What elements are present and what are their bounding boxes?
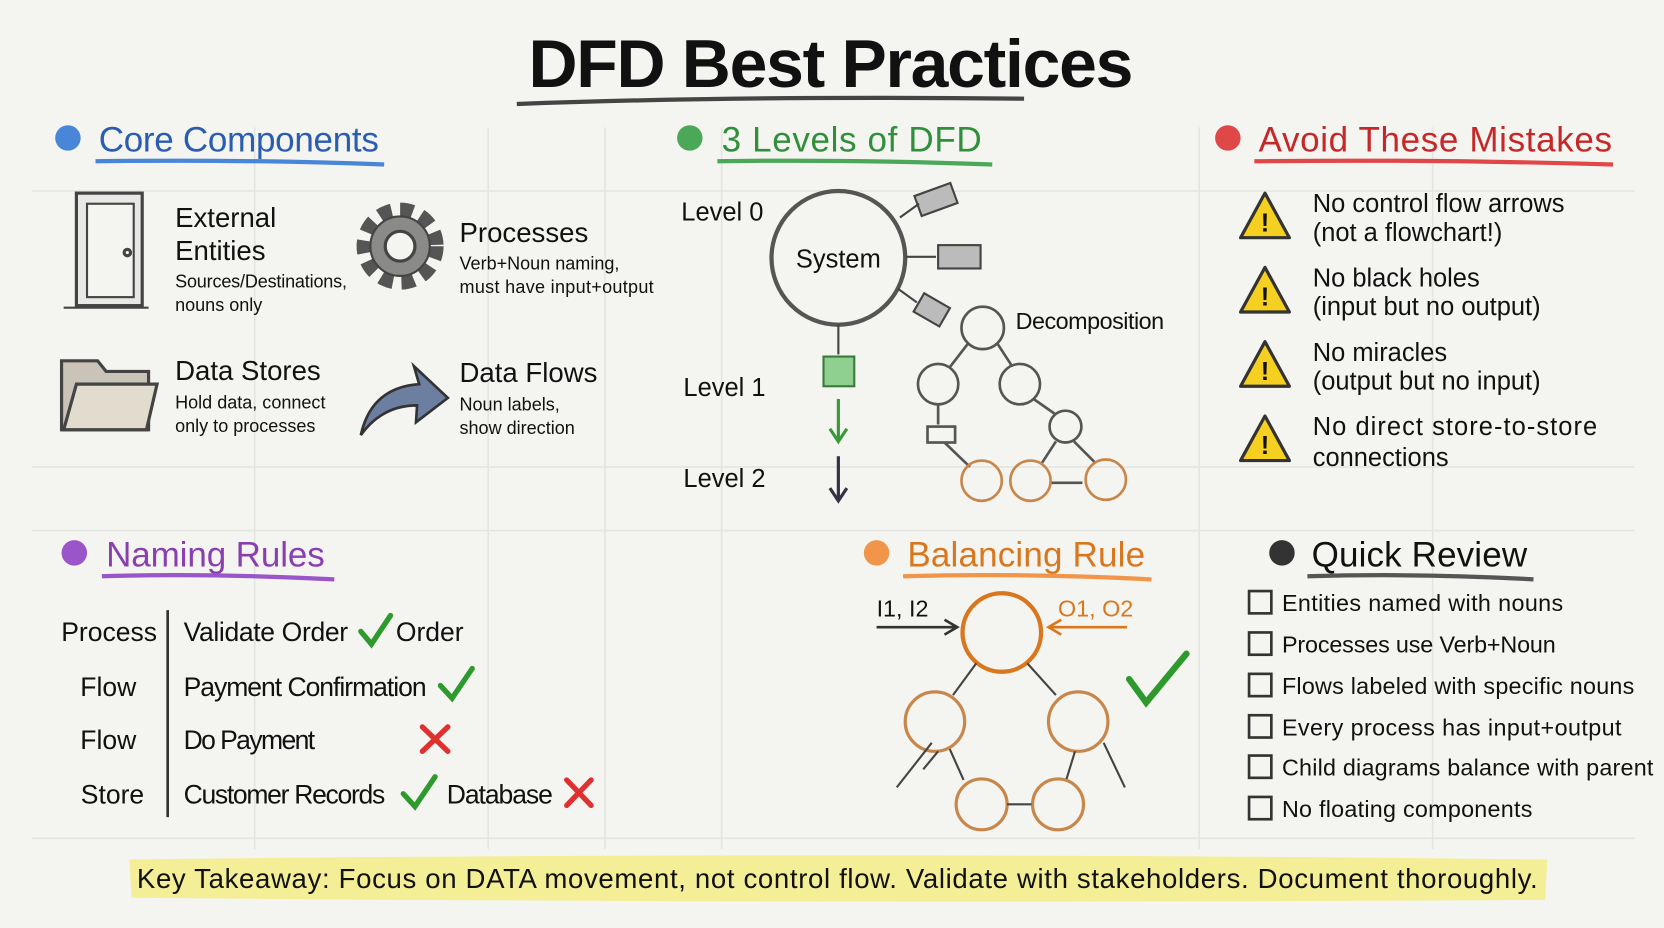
key takeaway (129, 855, 1547, 902)
heading: 3 levels: 3 Levels of DFD (722, 121, 982, 160)
panel: quick review checklist: Flows labeled with specific nouns (1282, 673, 1634, 699)
panel: quick review checklist: Processes use Verb+Noun (1282, 632, 1556, 658)
panel: mistakes: connections (1313, 444, 1449, 472)
panel: quick review checklist: Child diagrams balance with parent (1282, 755, 1654, 781)
icon: gear (364, 210, 436, 282)
panel: balancing diagram (877, 593, 1186, 830)
panel: naming rules table (61, 610, 591, 817)
panel: naming rules table: Process (61, 617, 157, 647)
panel: balancing diagram: O1, O2 (1058, 596, 1133, 622)
heading: quick review: Quick Review (1312, 536, 1528, 575)
panel: 3 levels diagram: Level 1 (683, 374, 766, 402)
panel: core components: Data Flows (460, 357, 597, 388)
panel: mistakes: No direct store-to-store (1313, 413, 1597, 441)
panel: mistakes: (output but no input) (1313, 367, 1541, 395)
panel: naming rules table: Customer Records (184, 779, 385, 809)
panel: naming rules table: Payment Confirmation (184, 672, 427, 702)
panel: mistakes: No control flow arrows (1313, 190, 1565, 218)
panel: naming rules table: Validate Order (184, 617, 348, 647)
heading: naming rules: Naming Rules (106, 536, 325, 575)
panel: core components: only to processes (175, 416, 315, 436)
panel: 3 levels diagram: Level 2 (683, 465, 766, 493)
icon: arrow (361, 366, 448, 435)
panel: core components: Noun labels, (460, 395, 560, 415)
panel: core components: nouns only (175, 295, 262, 315)
panel: core components: Hold data, connect (175, 393, 325, 413)
panel: mistakes: ! (1261, 358, 1269, 386)
panel: mistakes: ! (1261, 432, 1269, 460)
panel: 3 levels diagram (681, 183, 1164, 501)
panel: core components: Verb+Noun naming, (460, 254, 619, 274)
panel: core components: Data Stores (175, 355, 321, 386)
panel: mistakes: No black holes (1313, 265, 1480, 293)
key takeaway: Key Takeaway: Focus on DATA movement, not control flow. Validate with stakeholders. Document thoroughly. (137, 863, 1538, 894)
panel: naming rules table: Store (81, 779, 144, 809)
panel: core components: Sources/Destinations, (175, 272, 347, 292)
panel: core components: Processes (460, 217, 588, 248)
panel: naming rules table: Order (396, 617, 464, 647)
panel: quick review checklist: Entities named with nouns (1282, 590, 1563, 616)
decomposition tree (918, 307, 1126, 501)
icon: door (64, 193, 149, 308)
panel: naming rules table: Do Payment (184, 725, 316, 755)
panel: 3 levels diagram: Level 0 (681, 199, 763, 227)
panel: quick review checklist (1249, 590, 1654, 822)
panel: mistakes (1241, 190, 1597, 472)
panel: core components: show direction (460, 418, 575, 438)
panel: balancing diagram: I1, I2 (877, 596, 928, 622)
panel: quick review checklist: No floating components (1282, 796, 1532, 822)
panel: 3 levels diagram: Decomposition (1016, 308, 1164, 334)
panel: mistakes: No miracles (1313, 339, 1447, 367)
panel: mistakes: ! (1261, 284, 1269, 312)
panel: core components: External (175, 202, 276, 233)
icon: folder (62, 361, 157, 430)
panel: core components (62, 193, 654, 438)
title: DFD Best Practices (528, 27, 1133, 102)
panel: naming rules table: Flow (80, 725, 137, 755)
panel: mistakes: (input but no output) (1313, 293, 1541, 321)
panel: core components: must have input+output (460, 277, 654, 297)
panel: core components: Entities (175, 235, 266, 266)
heading: avoid mistakes: Avoid These Mistakes (1259, 121, 1612, 160)
panel: mistakes: ! (1261, 209, 1269, 237)
panel: mistakes: (not a flowchart!) (1313, 219, 1502, 247)
heading: core components: Core Components (99, 121, 379, 160)
panel: quick review checklist: Every process has input+output (1282, 714, 1622, 740)
panel: naming rules table: Flow (80, 672, 137, 702)
panel: 3 levels diagram: System (796, 245, 881, 273)
heading: balancing rule: Balancing Rule (907, 536, 1145, 575)
panel: naming rules table: Database (447, 779, 553, 809)
